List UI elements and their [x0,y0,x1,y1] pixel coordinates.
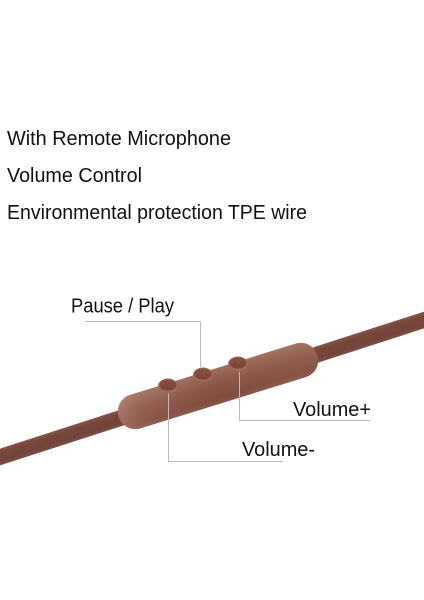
feature: TPE wire: Environmental protection TPE wire [7,202,307,224]
label: volume plus: Volume+ [293,399,371,421]
button: volume minus [158,378,178,394]
feature: remote microphone: With Remote Microphone [7,128,231,150]
button: volume plus [228,356,248,372]
label: pause / play: Pause / Play [71,296,174,318]
label: volume minus: Volume- [242,439,315,461]
remote buttons [158,356,248,394]
leader: volume minus [168,392,283,462]
remote control body [113,339,323,433]
feature list [7,128,307,224]
leader lines [85,322,370,462]
cable [0,307,424,470]
leader: pause / play [85,322,200,367]
feature: volume control: Volume Control [7,165,142,187]
button: pause / play [193,368,213,382]
leader: volume plus [240,372,370,420]
